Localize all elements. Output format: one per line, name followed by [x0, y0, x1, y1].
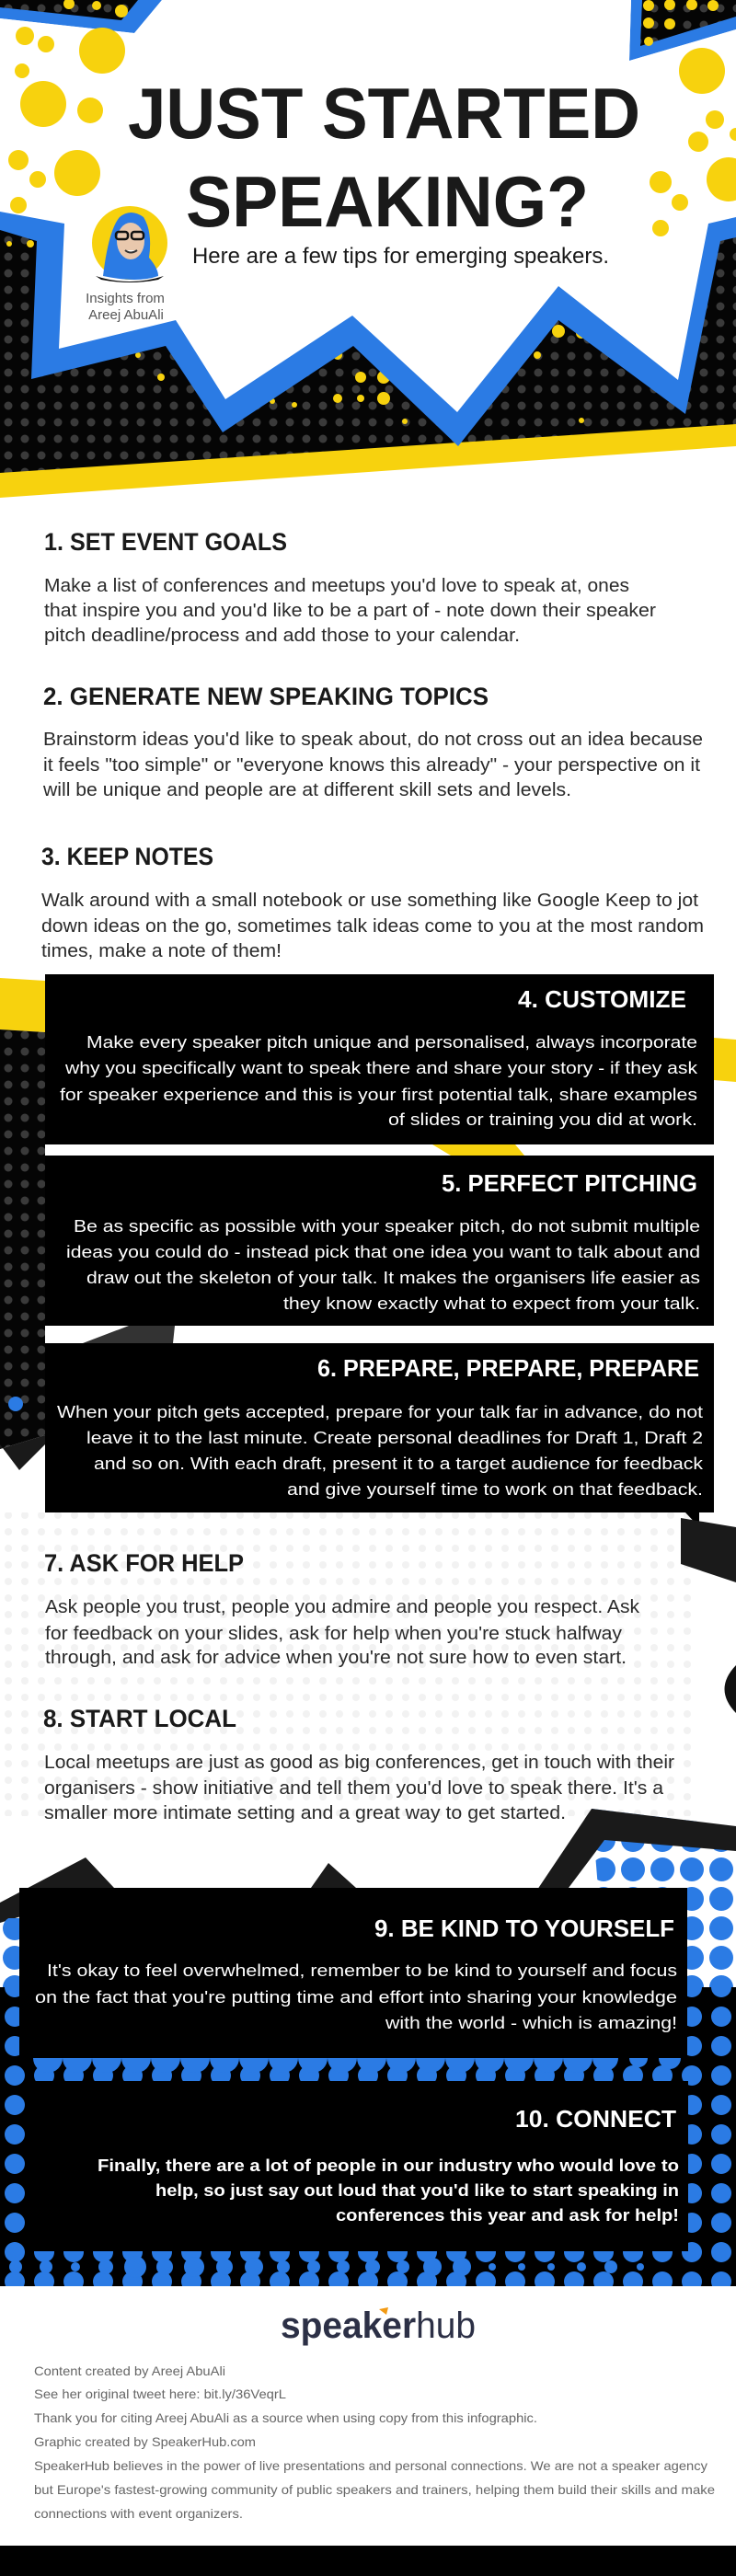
section 3: down ideas on the go, sometimes talk ideas come to you at the most random	[41, 916, 704, 937]
blue half-circle row	[33, 2058, 681, 2073]
section 2: will be unique and people are at different skill sets and levels.	[42, 780, 571, 800]
avatar caption: Insights from	[86, 291, 165, 306]
box 6: prepare	[45, 1343, 714, 1512]
box 6: prepare: When your pitch gets accepted, prepare for your talk far in advance, do not	[57, 1403, 703, 1421]
box 10: connect: help, so just say out loud that you'd like to start speaking in	[155, 2181, 679, 2200]
top-right corner shape	[629, 0, 736, 61]
footer credits	[34, 2363, 715, 2521]
avatar: Areej AbuAli	[92, 206, 167, 282]
section 7: for feedback on your slides, ask for help when you're stuck halfway	[45, 1624, 622, 1644]
box 4: customize: 4. CUSTOMIZE	[518, 985, 686, 1013]
section 3	[41, 843, 704, 961]
section 1: pitch deadline/process and add those to your calendar.	[44, 626, 520, 646]
speakerhub logo: speakerhub	[281, 2306, 476, 2346]
box 4: customize	[45, 974, 714, 1144]
section 8: organisers - show initiative and tell them you'd love to speak there. It's a	[44, 1778, 664, 1799]
section 1: 1. SET EVENT GOALS	[44, 528, 287, 556]
box 5: perfect pitching: draw out the skeleton of your talk. It makes the organisers life easier as	[86, 1269, 700, 1287]
box 10: connect: conferences this year and ask for help!	[336, 2206, 679, 2225]
top-left corner shape	[0, 0, 162, 151]
avatar caption: Areej AbuAli	[88, 307, 164, 323]
box 5: perfect pitching	[45, 1156, 714, 1326]
title: SPEAKING?	[186, 161, 589, 242]
box 6: prepare: 6. PREPARE, PREPARE, PREPARE	[317, 1354, 699, 1382]
speech burst	[0, 0, 736, 446]
footer credits: but Europe's fastest-growing community of public speakers and trainers, helping them build their skills and make	[34, 2482, 715, 2497]
section 1	[44, 528, 656, 646]
box 6: prepare: and give yourself time to work on that feedback.	[287, 1480, 703, 1499]
header background: dotted dark area	[0, 210, 736, 474]
section 8: 8. START LOCAL	[43, 1705, 236, 1732]
yellow diagonal stripe	[0, 424, 736, 498]
avatar caption	[86, 291, 165, 323]
section 7: Ask people you trust, people you admire and people you respect. Ask	[45, 1597, 640, 1617]
box 5: perfect pitching: 5. PERFECT PITCHING	[442, 1169, 697, 1197]
box 4: customize: Make every speaker pitch unique and personalised, always incorporate	[86, 1033, 697, 1052]
box 9: be kind to yourself: on the fact that you're putting time and effort into sharing your knowledge	[35, 1988, 677, 2007]
box 4: customize: for speaker experience and this is your first potential talk, share examples	[60, 1086, 697, 1104]
box 6: prepare: and so on. With each draft, present it to a target audience for feedback	[94, 1455, 704, 1473]
footer credits: Content created by Areej AbuAli	[34, 2363, 225, 2378]
yellow decorative circles	[8, 27, 736, 236]
section 7	[44, 1549, 640, 1668]
section 3: 3. KEEP NOTES	[41, 843, 213, 870]
section 7: 7. ASK FOR HELP	[44, 1549, 244, 1577]
box 10: connect	[33, 2081, 688, 2251]
box 5: perfect pitching: they know exactly what to expect from your talk.	[283, 1294, 700, 1313]
section 8: Local meetups are just as good as big conferences, get in touch with their	[44, 1753, 674, 1773]
footer credits: Thank you for citing Areej AbuAli as a source when using copy from this infographic.	[34, 2410, 537, 2425]
box 4: customize: of slides or training you did at work.	[388, 1110, 697, 1129]
footer credits: SpeakerHub believes in the power of live presentations and personal connections. We are not a speaker agency	[34, 2458, 707, 2473]
dark section backdrop for tip 10	[0, 1987, 736, 2288]
box 6: prepare: leave it to the last minute. Create personal deadlines for Draft 1, Draft 2	[86, 1429, 703, 1447]
section 8	[43, 1705, 674, 1823]
section 3: Walk around with a small notebook or use something like Google Keep to jot	[41, 891, 698, 911]
bottom black bar	[0, 2546, 736, 2576]
footer background	[0, 2286, 736, 2546]
yellow sparkle dots in dark area	[6, 240, 715, 424]
box 4: customize: why you specifically want to speak there and share your story - if they ask	[64, 1059, 698, 1077]
section 2: it feels "too simple" or "everyone knows this already" - your perspective on it	[43, 755, 700, 776]
title: JUST STARTED	[128, 73, 640, 154]
box 5: perfect pitching: Be as specific as possible with your speaker pitch, do not submit multiple	[74, 1217, 700, 1236]
title	[128, 73, 640, 242]
box 9: be kind to yourself: It's okay to feel overwhelmed, remember to be kind to yourself and focus	[47, 1961, 677, 1980]
footer credits: connections with event organizers.	[34, 2506, 243, 2521]
footer credits: See her original tweet here: bit.ly/36VeqrL	[34, 2386, 286, 2401]
subtitle: Here are a few tips for emerging speakers.	[192, 244, 609, 269]
box 9: be kind to yourself: with the world - which is amazing!	[385, 2014, 677, 2032]
bottom blue dot row	[9, 2256, 644, 2278]
section 3: times, make a note of them!	[41, 941, 282, 961]
section 7: through, and ask for advice when you're not sure how to even start.	[45, 1648, 627, 1668]
section 2	[42, 683, 703, 800]
section 8: smaller more intimate setting and a great way to get started.	[44, 1803, 566, 1823]
section 1: Make a list of conferences and meetups you'd love to speak at, ones	[44, 576, 629, 596]
box 9: be kind to yourself: 9. BE KIND TO YOURSELF	[374, 1915, 674, 1942]
box 5: perfect pitching: ideas you could do - instead pick that one idea you want to talk about and	[66, 1243, 700, 1261]
section 2: Brainstorm ideas you'd like to speak about, do not cross out an idea because	[43, 730, 703, 750]
section 2: 2. GENERATE NEW SPEAKING TOPICS	[43, 683, 489, 710]
middle decorations	[0, 978, 736, 2022]
section 1: that inspire you and you'd like to be a part of - note down their speaker	[44, 601, 656, 621]
box 9: be kind to yourself	[19, 1888, 687, 2056]
footer credits: Graphic created by SpeakerHub.com	[34, 2434, 256, 2449]
box 10: connect: 10. CONNECT	[515, 2105, 676, 2133]
box 10: connect: Finally, there are a lot of people in our industry who would love to	[98, 2156, 679, 2175]
